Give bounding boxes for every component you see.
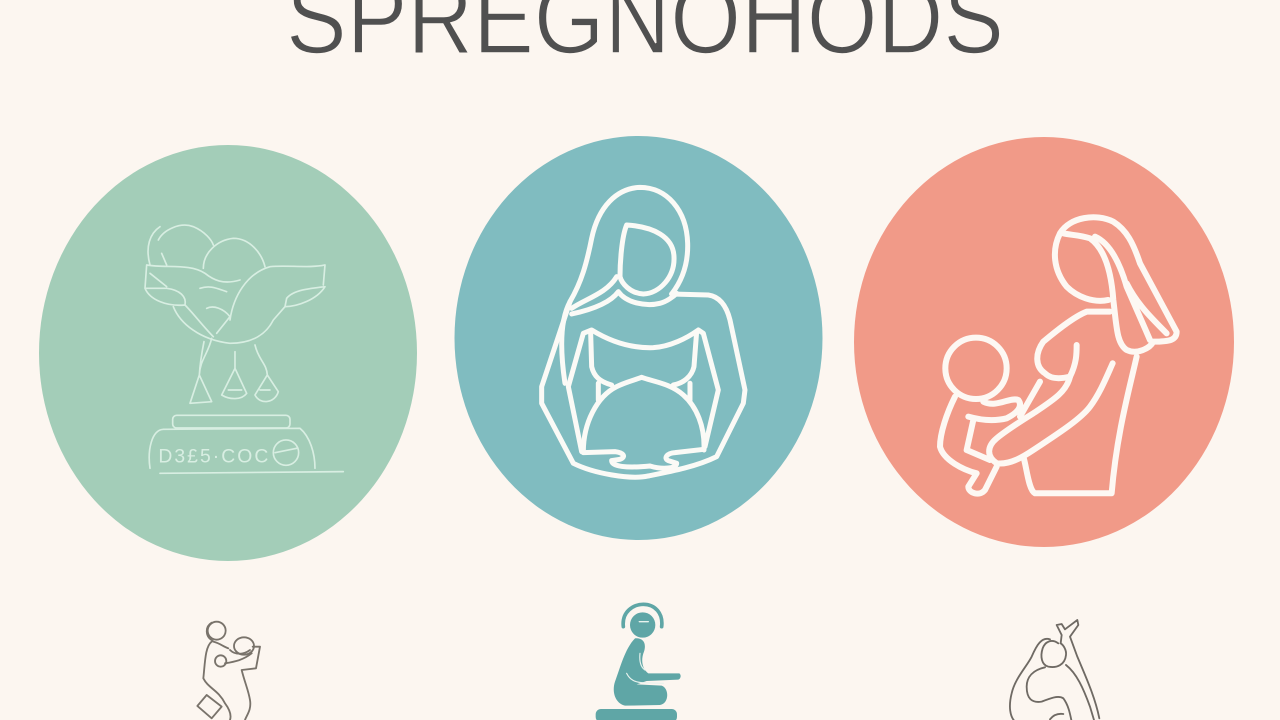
icon: seated meditating figure: [596, 604, 681, 720]
body: [614, 638, 681, 706]
scale readout: D3£5·COC: [158, 447, 268, 468]
head: [630, 612, 655, 638]
green circle: [39, 145, 417, 561]
icon: birds over a scale: [145, 225, 343, 473]
coral circle: [854, 137, 1234, 547]
body highlight lines: [627, 653, 663, 683]
mat: [596, 709, 677, 720]
headphone arc: [623, 604, 662, 627]
panel: coral circle with mother and baby: [854, 137, 1234, 547]
icon: pregnant woman: [542, 187, 745, 477]
icon: mother holding baby: [940, 217, 1177, 494]
teal circle: [454, 136, 822, 540]
icon: parents with child, line drawing: [197, 622, 260, 720]
eye: [639, 620, 648, 624]
panel: green circle with scale: [39, 145, 417, 561]
icon: stretching figure, line drawing: [1010, 620, 1099, 720]
panel: teal circle with pregnant woman: [454, 136, 822, 540]
